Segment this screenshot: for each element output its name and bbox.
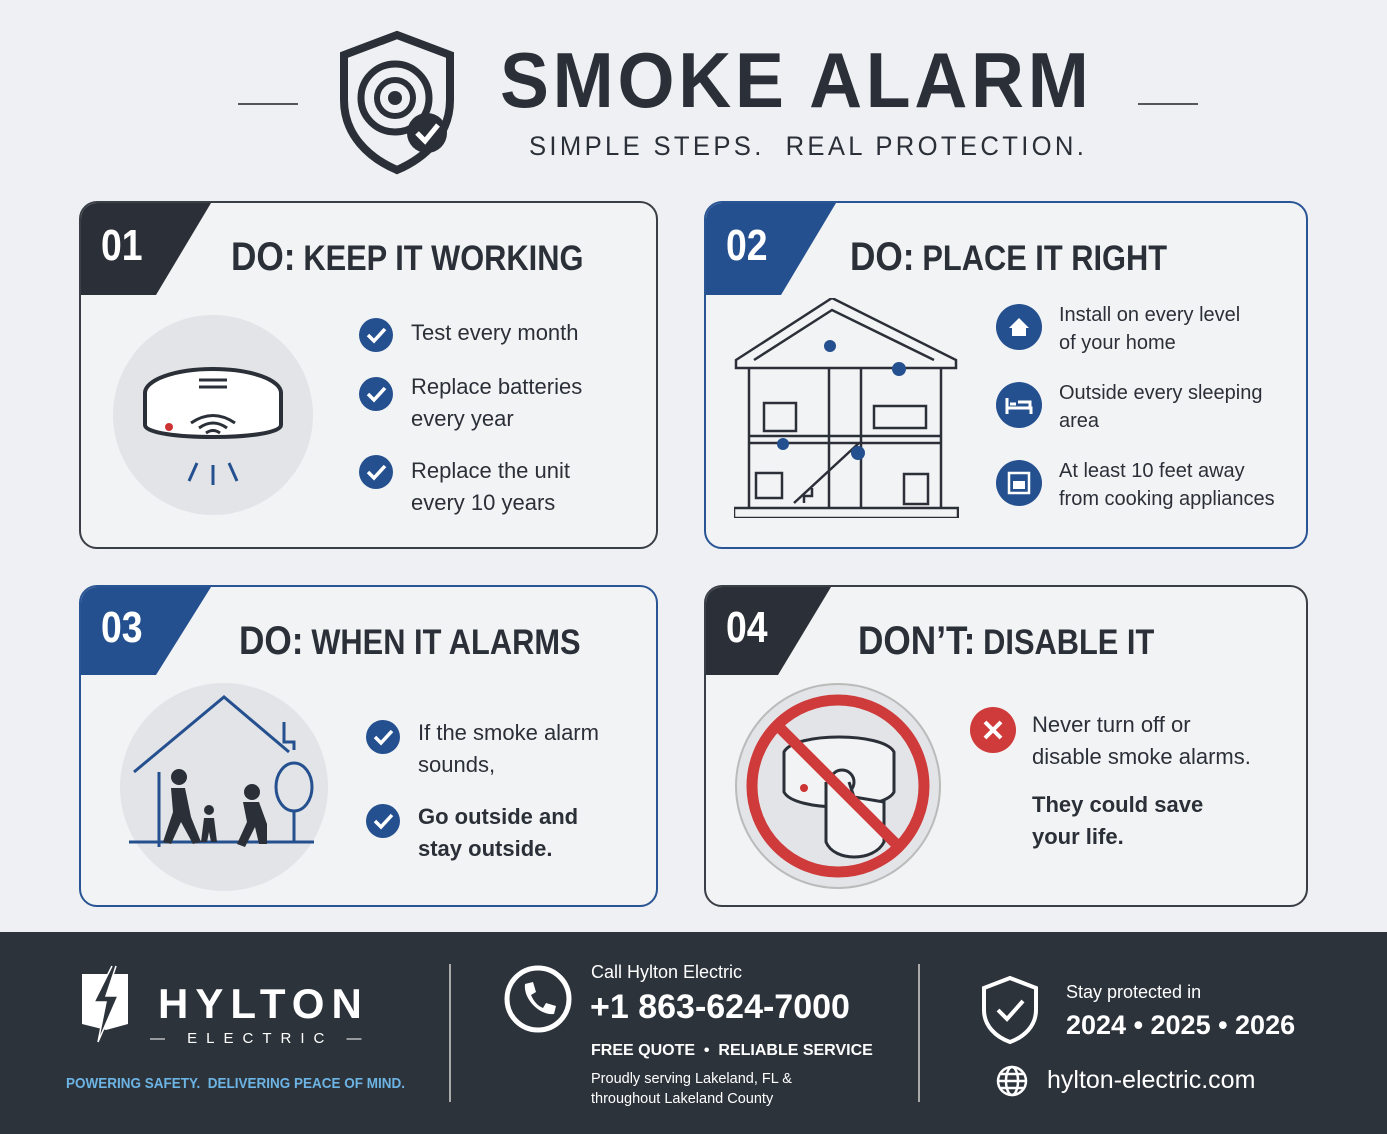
- tab 02: [706, 203, 836, 295]
- checklist: Go outside and: [418, 804, 578, 829]
- icon: shield with alarm: [340, 30, 454, 174]
- contact block: throughout Lakeland County: [591, 1091, 773, 1107]
- placement list: from cooking appliances: [1059, 488, 1275, 510]
- checklist: If the smoke alarm: [418, 720, 599, 745]
- icon: home: [996, 304, 1042, 350]
- years and website: [982, 976, 1295, 1096]
- checklist: every year: [411, 406, 514, 431]
- warning text: Never turn off or: [1032, 712, 1191, 737]
- icon: red x: [970, 707, 1016, 753]
- warning text: your life.: [1032, 824, 1124, 849]
- warning text: [970, 707, 1251, 849]
- heading: DO: PLACE IT RIGHT: [850, 235, 1167, 279]
- checklist: Test every month: [411, 320, 579, 345]
- placement list: Install on every level: [1059, 304, 1240, 326]
- icon: no-disable sign: [735, 683, 941, 889]
- tab 01: [81, 203, 211, 295]
- panel: 03 when it alarms: [79, 585, 658, 907]
- placement list: area: [1059, 410, 1099, 432]
- header: [238, 30, 1198, 174]
- years and website: hylton-electric.com: [1047, 1066, 1255, 1094]
- placement list: At least 10 feet away: [1059, 460, 1245, 482]
- logo: Hylton Electric: — ELECTRIC —: [150, 1030, 371, 1047]
- checklist: Replace the unit: [411, 458, 570, 483]
- logo: Hylton Electric: HYLTON: [158, 980, 369, 1027]
- subtitle: SIMPLE STEPS. REAL PROTECTION.: [529, 131, 1087, 161]
- checklist: stay outside.: [418, 836, 552, 861]
- tagline: POWERING SAFETY. DELIVERING PEACE OF MIND.: [66, 1075, 405, 1092]
- panel: 01 keep it working: [79, 201, 658, 549]
- panel: 04 don't disable it: 04: [726, 603, 768, 652]
- tab 03: [81, 587, 211, 675]
- warning text: They could save: [1032, 792, 1203, 817]
- icon: smoke detector: [113, 315, 313, 515]
- heading: DO: WHEN IT ALARMS: [239, 619, 581, 663]
- contact block: Call Hylton Electric: [591, 962, 742, 982]
- warning text: disable smoke alarms.: [1032, 744, 1251, 769]
- icon: bed: [996, 382, 1042, 428]
- placement list: [996, 304, 1275, 510]
- years and website: Stay protected in: [1066, 982, 1201, 1002]
- title: SMOKE ALARM: [500, 36, 1093, 124]
- contact block: [504, 962, 873, 1107]
- checklist: [366, 720, 599, 861]
- panel: 04 don't disable it: [704, 585, 1308, 907]
- icon: oven: [996, 460, 1042, 506]
- icon: house cross-section: [734, 298, 959, 518]
- contact block: +1 863-624-7000: [590, 988, 850, 1026]
- heading: DON’T: DISABLE IT: [858, 619, 1154, 663]
- checklist: [359, 318, 582, 515]
- panel: 01 keep it working: 01: [101, 221, 143, 270]
- checklist: every 10 years: [411, 490, 555, 515]
- icon: family leaving house: [120, 683, 328, 891]
- checklist: sounds,: [418, 752, 495, 777]
- contact block: FREE QUOTE • RELIABLE SERVICE: [591, 1042, 873, 1059]
- panel: 03 when it alarms: 03: [101, 603, 143, 652]
- placement list: Outside every sleeping: [1059, 382, 1262, 404]
- panel: 02 place it right: [704, 201, 1308, 549]
- years and website: 2024 • 2025 • 2026: [1066, 1010, 1295, 1040]
- contact block: Proudly serving Lakeland, FL &: [591, 1071, 792, 1087]
- logo: Hylton Electric: [82, 966, 371, 1047]
- placement list: of your home: [1059, 332, 1176, 354]
- footer: [0, 932, 1387, 1134]
- heading: DO: KEEP IT WORKING: [231, 235, 583, 279]
- checklist: Replace batteries: [411, 374, 582, 399]
- tab 04: [706, 587, 831, 675]
- panel: 02 place it right: 02: [726, 221, 768, 270]
